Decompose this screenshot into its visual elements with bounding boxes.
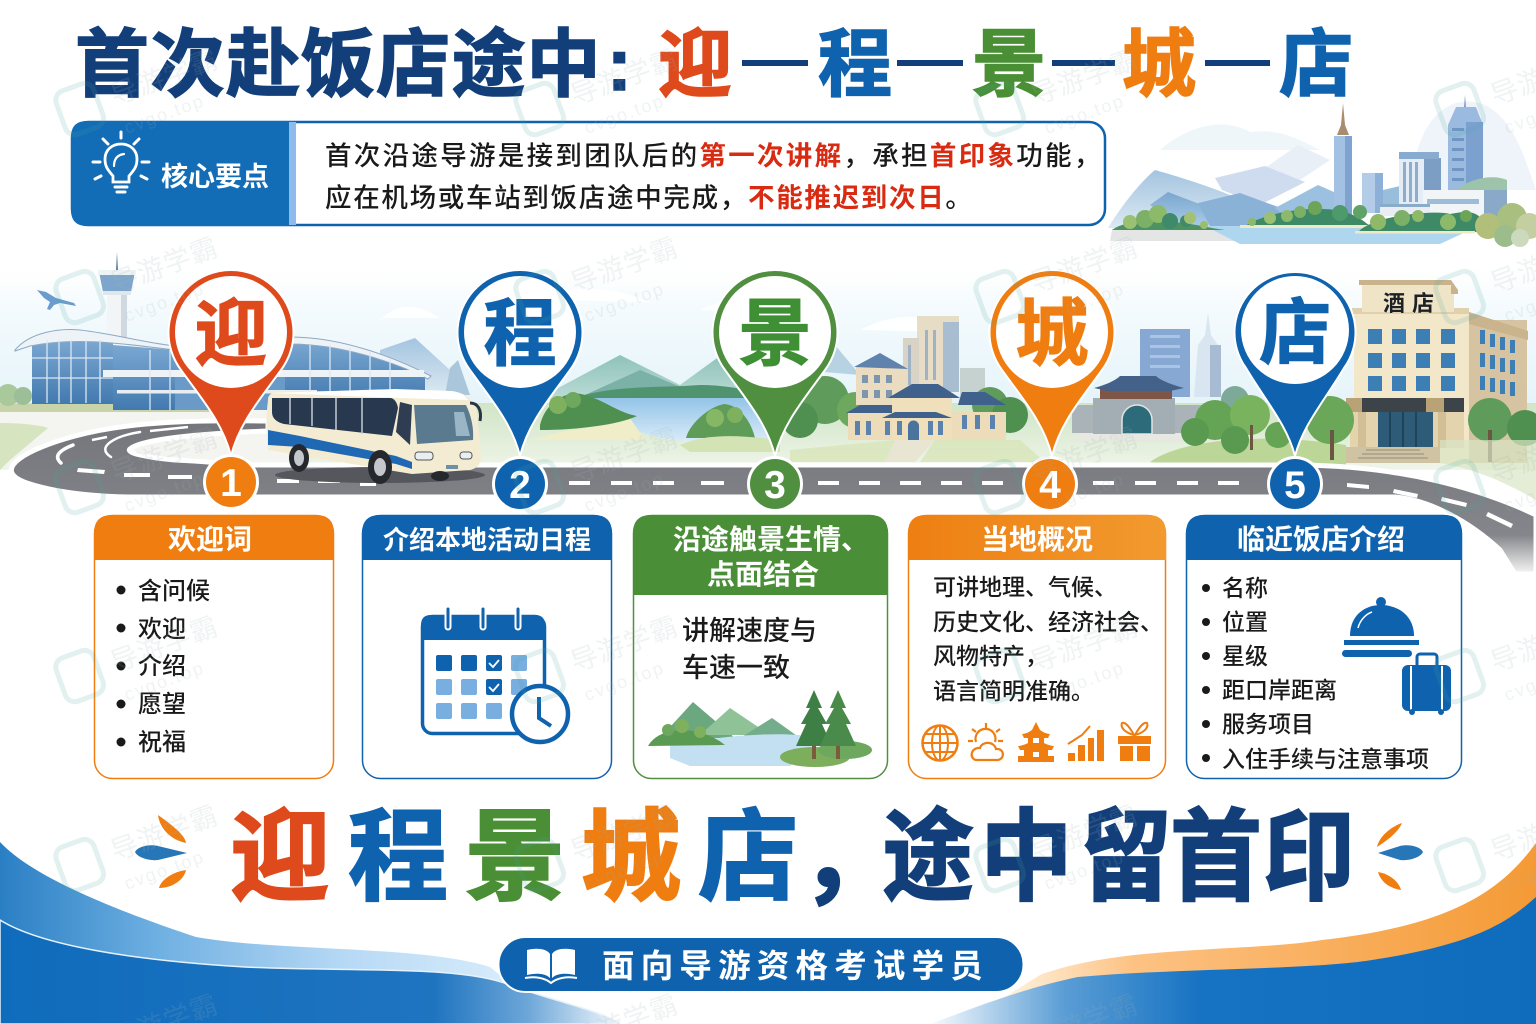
audience pill (498, 937, 1024, 992)
number 1 (203, 454, 259, 510)
bullet list: 服务项目 (1222, 711, 1314, 737)
bullet list: 名称 (1222, 575, 1268, 601)
text: cvgo.top (1042, 468, 1127, 516)
city gate and skyscrapers (1070, 313, 1249, 442)
title: 景 (972, 23, 1046, 106)
number 3: 3 (764, 464, 786, 507)
icon: globe (922, 726, 958, 760)
body text: 可讲地理、气候、 (933, 574, 1117, 600)
bullet list: 位置 (1222, 609, 1268, 635)
text: 导游学霸 (567, 44, 682, 111)
core point text (325, 141, 1103, 213)
title: 程 (818, 23, 892, 106)
road (11, 421, 1536, 577)
core point text: 应在机场或车站到饭店途中完成，不能推迟到次日。 (325, 183, 974, 213)
body text: 历史文化、经济社会、 (933, 609, 1163, 635)
bus side windows (272, 398, 398, 436)
panel: nearby hotel (1186, 515, 1462, 778)
text: cvgo.top (582, 657, 667, 705)
text: 导游学霸 (107, 800, 222, 867)
terminal building (0, 330, 431, 410)
icon: cloche (1342, 597, 1419, 657)
title: 城 (1122, 23, 1196, 106)
icon: calendar (421, 609, 568, 742)
panel: local schedule (362, 515, 612, 778)
pin 4: 城 (990, 270, 1115, 456)
pin 3: 景 (712, 270, 838, 456)
body text: 讲解速度与 (682, 616, 817, 646)
icon: light bulb (93, 132, 149, 192)
airplane (37, 290, 76, 310)
title: 迎 (658, 23, 732, 106)
bullet list: 介绍 (138, 653, 186, 680)
right burst (1377, 823, 1423, 890)
pin 1: 迎 (168, 270, 294, 456)
top right landscape (1108, 95, 1536, 247)
route scene background (0, 252, 1536, 500)
shoreline trees (1112, 201, 1536, 247)
panel: scenery along the way: 沿途触景生情、 (673, 524, 869, 555)
panel: local overview: 当地概况 (981, 524, 1093, 555)
main hall (846, 384, 1006, 440)
number 5: 5 (1284, 464, 1306, 507)
hotel (1346, 280, 1536, 463)
audience pill: 面向导游资格考试学员 (602, 948, 989, 984)
roadside trees (1150, 395, 1354, 466)
text: cvgo.top (122, 657, 207, 705)
text: 导游学霸 (1027, 611, 1142, 678)
body text (682, 616, 817, 683)
bullet list: 入住手续与注意事项 (1222, 746, 1429, 772)
bullet list: 欢迎 (138, 616, 186, 643)
bullet list: 距口岸距离 (1222, 677, 1337, 703)
body text: 车速一致 (682, 653, 790, 683)
text: cvgo.top (1042, 657, 1127, 705)
panel: welcome speech (94, 515, 334, 778)
text: cvgo.top (1042, 278, 1127, 326)
number 2: 2 (509, 464, 531, 507)
panel: nearby hotel: 临近饭店介绍 (1237, 524, 1405, 555)
icon: gift (1118, 723, 1151, 761)
panel: scenery along the way: 点面结合 (707, 559, 819, 590)
text: cvgo.top (122, 90, 207, 138)
body text (933, 574, 1163, 704)
bullet list: 含问候 (138, 578, 210, 605)
text: cvgo.top (582, 468, 667, 516)
icon: pagoda (1018, 722, 1054, 762)
core point text: 首次沿途导游是接到团队后的第一次讲解，承担首印象功能， (325, 141, 1103, 171)
number 3 (747, 456, 803, 512)
ground strip (0, 403, 1536, 469)
core point label panel: 核心要点 (161, 162, 269, 192)
text: cvgo.top (1042, 846, 1127, 894)
slogan: 城 (581, 802, 681, 914)
panel: local overview (908, 515, 1166, 778)
bus (266, 389, 485, 484)
number 4 (1022, 456, 1078, 512)
lane markings (58, 427, 1513, 528)
text: 导游学霸 (107, 44, 222, 111)
text: cvgo.top (582, 846, 667, 894)
slogan: 程 (348, 802, 448, 914)
slogan (230, 802, 1355, 914)
slogan: 景 (465, 802, 565, 914)
body text: 语言简明准确。 (933, 678, 1094, 704)
number 4: 4 (1039, 464, 1061, 507)
callout: core point (71, 121, 1105, 226)
bullet list (1202, 575, 1429, 772)
text: 导游学霸 (1027, 232, 1142, 299)
bullet list: 星级 (1222, 643, 1268, 669)
pin 2: 程: 程 (484, 294, 556, 375)
slogan: 店 (698, 802, 798, 914)
text: cvgo.top (122, 846, 207, 894)
text: 导游学霸 (107, 232, 222, 299)
pin 5: 店: 店 (1259, 294, 1331, 374)
title: 店 (1279, 23, 1353, 106)
pin 4: 城: 城 (1016, 294, 1088, 375)
tall tower (1334, 103, 1352, 214)
text: 导游学霸 (567, 800, 682, 867)
body text: 风物特产， (933, 643, 1048, 669)
panel: welcome speech: 欢迎词 (168, 524, 252, 555)
slogan: 途中留首印 (882, 802, 1355, 914)
mountains and lake (380, 338, 780, 452)
title (75, 23, 1353, 106)
windows (1368, 329, 1515, 396)
town buildings (782, 316, 1045, 462)
icon: open book (525, 949, 577, 983)
text: cvgo.top (1042, 90, 1127, 138)
text: cvgo.top (122, 468, 207, 516)
panel: local schedule: 介绍本地活动日程 (383, 525, 591, 555)
number 2 (492, 456, 548, 512)
text: 导游学霸 (107, 611, 222, 678)
bullet list (116, 578, 210, 756)
panel: scenery along the way (633, 515, 888, 778)
windshield (414, 405, 473, 444)
number 1: 1 (220, 462, 242, 505)
pin 2: 程 (458, 270, 582, 456)
text: 导游学霸 (567, 611, 682, 678)
text: cvgo.top (122, 278, 207, 326)
text: cvgo.top (582, 278, 667, 326)
slogan: ， (800, 802, 900, 914)
icon: bar chart (1068, 726, 1104, 761)
slogan: 迎 (230, 802, 330, 914)
pin 3: 景: 景 (738, 294, 812, 375)
pin 1: 迎: 迎 (194, 294, 268, 375)
text: 导游学霸 (107, 422, 222, 489)
text: 导游学霸 (567, 232, 682, 299)
bullet list: 祝福 (138, 729, 186, 756)
number 5 (1267, 456, 1323, 512)
text: cvgo.top (582, 90, 667, 138)
pin 5: 店 (1234, 272, 1356, 456)
illustration: mountains and pines (648, 690, 872, 767)
airport (0, 252, 431, 410)
tall towers (903, 316, 985, 396)
text: 导游学霸 (1027, 800, 1142, 867)
control tower (98, 252, 136, 338)
icon: sun and cloud (968, 723, 1003, 760)
bullet list: 愿望 (138, 691, 186, 718)
text: 导游学霸 (1027, 422, 1142, 489)
icon: suitcase (1402, 654, 1451, 715)
core point label panel (71, 121, 296, 226)
bottom waves (0, 842, 1536, 1024)
hotel: 酒店 (1383, 291, 1434, 316)
left burst (135, 815, 187, 888)
text: 导游学霸 (567, 422, 682, 489)
title: 首次赴饭店途中: (75, 23, 632, 106)
text: 导游学霸 (1027, 44, 1142, 111)
